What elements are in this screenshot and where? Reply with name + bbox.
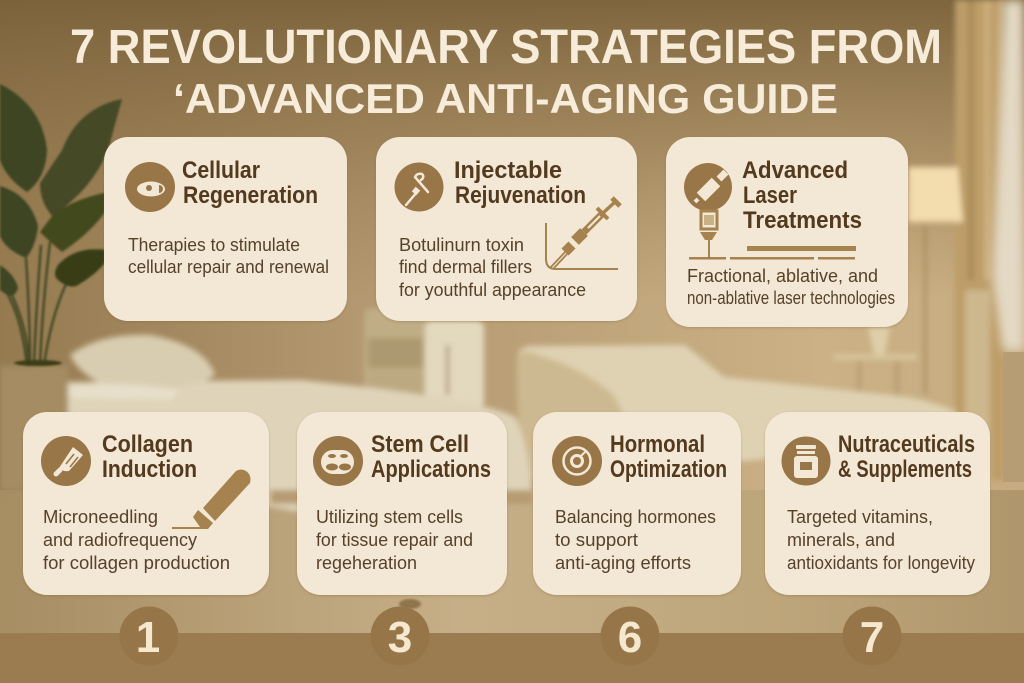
description xyxy=(128,235,329,277)
number badge 1: 1 xyxy=(136,613,160,662)
heading: Hormonal xyxy=(610,431,705,458)
description xyxy=(555,507,716,573)
heading xyxy=(838,431,975,483)
heading xyxy=(742,157,862,234)
number badge 7: 7 xyxy=(860,613,884,662)
heading xyxy=(610,431,727,483)
heading: Injectable xyxy=(454,157,562,184)
description: Therapies to stimulate xyxy=(128,235,300,255)
title: ‘ADVANCED ANTI-AGING GUIDE xyxy=(173,75,838,122)
description xyxy=(787,507,975,573)
icon: stem cells xyxy=(313,436,363,486)
heading: Laser xyxy=(743,182,797,209)
panel: stem cell applications xyxy=(297,412,507,595)
heading xyxy=(371,431,491,483)
panel: cellular regeneration xyxy=(104,137,347,321)
number badge 3 xyxy=(370,606,430,666)
description: for tissue repair and xyxy=(316,530,473,550)
floor lamp xyxy=(908,167,963,394)
heading: Regeneration xyxy=(183,182,318,209)
icon: syringe xyxy=(546,198,620,269)
description: Utilizing stem cells xyxy=(316,507,463,527)
icon: pen xyxy=(172,470,250,529)
description: Targeted vitamins, xyxy=(787,507,933,527)
panel: advanced laser treatments xyxy=(666,137,908,327)
bed right xyxy=(517,345,960,480)
panel: injectable rejuvenation xyxy=(376,137,637,321)
heading xyxy=(454,157,586,209)
heading: Applications xyxy=(371,456,491,483)
number badge 6 xyxy=(600,606,660,666)
title: 7 REVOLUTIONARY STRATEGIES FROM xyxy=(70,21,942,74)
icon: laser xyxy=(684,163,856,260)
heading: Optimization xyxy=(610,456,727,483)
description: Microneedling xyxy=(43,507,158,527)
panel: hormonal optimization xyxy=(533,412,741,595)
device xyxy=(364,308,484,408)
description: cellular repair and renewal xyxy=(128,257,329,277)
description: minerals, and xyxy=(787,530,895,550)
heading xyxy=(102,431,197,483)
description xyxy=(43,507,230,573)
number badge 7 xyxy=(842,606,902,666)
description: Fractional, ablative, and xyxy=(687,266,878,286)
heading: Stem Cell xyxy=(371,431,469,458)
heading: Cellular xyxy=(182,157,260,184)
heading: Treatments xyxy=(743,207,862,234)
number badge 6: 6 xyxy=(618,613,642,662)
description xyxy=(687,266,895,308)
bed left xyxy=(60,335,532,512)
icon: hormone target xyxy=(552,436,602,486)
icon: injector xyxy=(394,162,444,212)
panel: nutraceuticals and supplements xyxy=(765,412,990,595)
icon: supplement jar xyxy=(782,436,830,486)
sheer curtain xyxy=(992,0,1024,350)
heading: & Supplements xyxy=(838,456,972,483)
heading xyxy=(182,157,318,209)
heading: Rejuvenation xyxy=(455,182,586,209)
icon: cell xyxy=(125,162,175,212)
description: non-ablative laser technologies xyxy=(687,288,895,308)
panel: collagen induction xyxy=(23,412,269,595)
plant xyxy=(0,84,122,366)
heading: Collagen xyxy=(102,431,193,458)
heading: Advanced xyxy=(742,157,848,184)
description: anti-aging efforts xyxy=(555,553,691,573)
heading: Nutraceuticals xyxy=(838,431,975,458)
description: for collagen production xyxy=(43,553,230,573)
description xyxy=(316,507,473,573)
description xyxy=(399,235,586,300)
description: antioxidants for longevity xyxy=(787,553,975,573)
curtain xyxy=(955,0,1005,480)
description: find dermal fillers xyxy=(399,257,532,277)
description: Botulinurn toxin xyxy=(399,235,524,255)
number badge 1 xyxy=(120,606,178,666)
description: and radiofrequency xyxy=(43,530,197,550)
side table xyxy=(833,327,917,396)
title xyxy=(70,21,942,122)
pot xyxy=(0,366,68,491)
description: to support xyxy=(555,530,638,550)
icon: microneedle xyxy=(41,436,91,486)
description: Balancing hormones xyxy=(555,507,716,527)
description: regeheration xyxy=(316,553,417,573)
heading: Induction xyxy=(102,456,197,483)
number badge 3: 3 xyxy=(388,613,412,662)
description: for youthful appearance xyxy=(399,280,586,300)
